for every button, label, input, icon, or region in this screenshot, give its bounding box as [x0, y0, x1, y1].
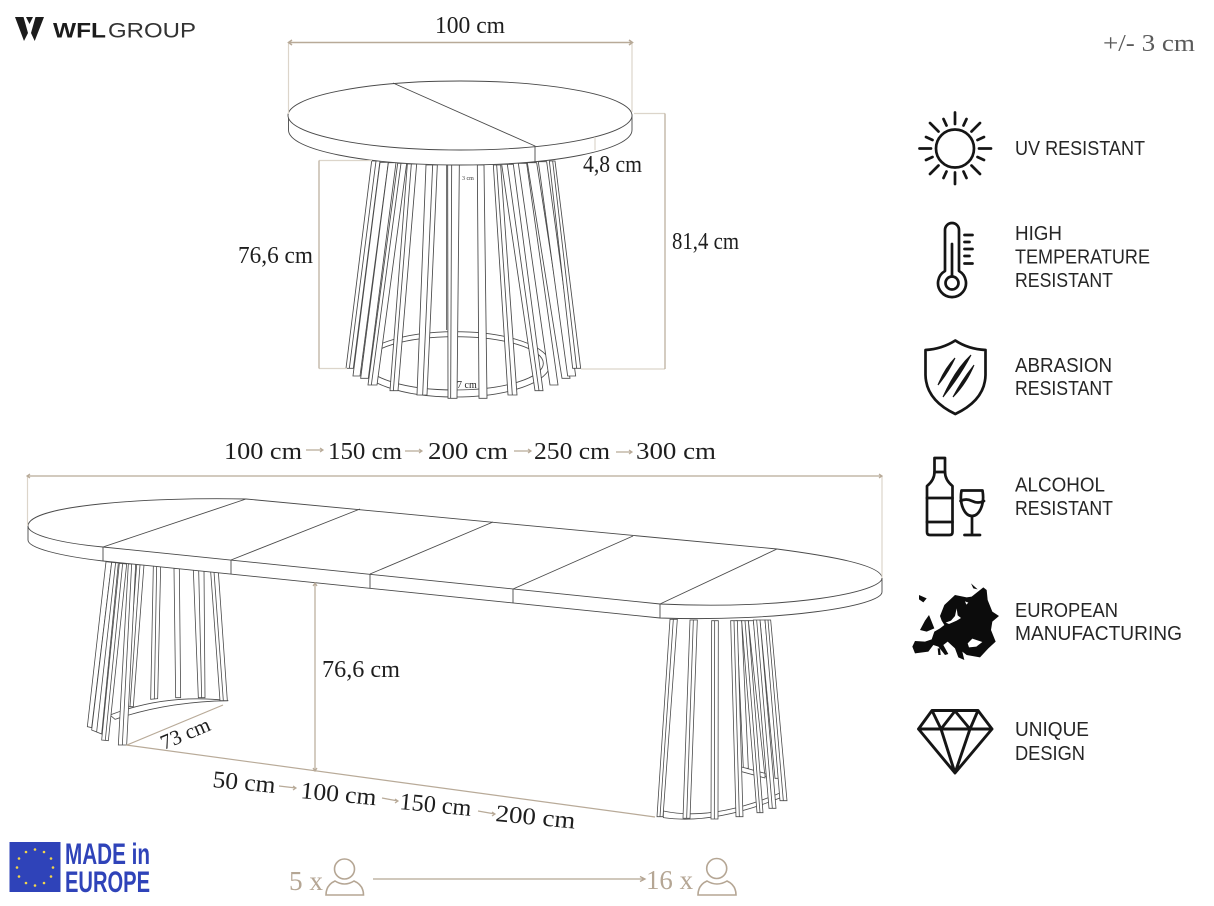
extension length labels: [224, 439, 716, 465]
icon: W mark: [15, 17, 44, 41]
extended leg height dimension: 76,6 cm: [322, 657, 400, 683]
leg spacing dimension: [126, 745, 655, 835]
logo wordmark: [53, 20, 196, 42]
label: TEMPERATURE: [1015, 246, 1150, 268]
icon: map of Europe: [912, 583, 999, 660]
logo wordmark: GROUP: [108, 20, 196, 42]
depth dimension: [127, 705, 223, 755]
label: [1015, 222, 1150, 292]
icon: scratched shield: [926, 340, 986, 414]
label: [1015, 474, 1113, 520]
extended leg height dimension: [313, 583, 400, 771]
feature: European manufacturing: [912, 583, 1182, 660]
label: MANUFACTURING: [1015, 622, 1182, 645]
label: HIGH: [1015, 222, 1062, 245]
leg spacing dimension: 100 cm: [299, 778, 378, 811]
left table base: [87, 562, 228, 745]
extended width dimension: [27, 474, 882, 578]
label: [1015, 718, 1089, 765]
feature: UV resistant: [920, 112, 1145, 184]
leg height dimension: [238, 160, 372, 368]
total height dimension: [581, 114, 739, 369]
top thickness dimension: [583, 137, 642, 178]
slat width labels: [457, 176, 477, 391]
width dimension: [288, 13, 632, 114]
label: UNIQUE: [1015, 718, 1089, 741]
leg spacing dimension: 200 cm: [494, 801, 577, 835]
badge text: [65, 838, 150, 899]
slat width labels: 3 cm: [462, 176, 474, 182]
logo wordmark: WFL: [53, 20, 106, 42]
label: ABRASION: [1015, 354, 1112, 377]
arrow: [373, 876, 645, 882]
leg spacing dimension: 50 cm: [211, 767, 277, 799]
tolerance note: +/- 3 cm: [1103, 31, 1195, 57]
label: [1015, 599, 1182, 645]
icon: person: [698, 858, 736, 895]
label: EUROPEAN: [1015, 599, 1118, 622]
label: RESISTANT: [1015, 497, 1113, 520]
extension length labels: 200 cm: [428, 439, 508, 465]
feature: unique design: [918, 710, 1089, 773]
label: RESISTANT: [1015, 269, 1113, 292]
extended table top: [28, 499, 882, 619]
extension length labels: 250 cm: [534, 439, 610, 465]
right table base: [657, 619, 787, 819]
table top: [288, 81, 632, 165]
extension length labels: 300 cm: [636, 439, 716, 465]
icon: diamond: [918, 710, 992, 773]
extended table drawing: [27, 474, 882, 835]
icon: EU flag: [10, 842, 60, 892]
feature: alcohol resistant: [927, 458, 1113, 535]
label: ALCOHOL: [1015, 474, 1105, 496]
label: [1015, 354, 1113, 400]
badge text: MADE in: [65, 838, 150, 871]
logo: WFL Group: [15, 17, 196, 42]
label: UV RESISTANT: [1015, 137, 1145, 160]
leg height dimension: 76,6 cm: [238, 243, 313, 269]
badge: made in Europe: [10, 838, 150, 899]
slat width labels: 7 cm: [457, 380, 477, 391]
label: 5 x: 5 x: [289, 866, 324, 896]
icon: sun: [920, 112, 991, 184]
top thickness dimension: 4,8 cm: [583, 152, 642, 178]
round table drawing: [238, 13, 739, 398]
leg spacing dimension: 150 cm: [398, 789, 473, 822]
badge text: EUROPE: [65, 866, 150, 899]
extension length labels: 150 cm: [328, 439, 402, 465]
table base slats: [346, 161, 581, 398]
icon: thermometer: [938, 223, 972, 297]
icon: bottle and glass: [927, 458, 984, 535]
total height dimension: 81,4 cm: [672, 229, 739, 255]
icon: person: [326, 859, 364, 895]
label: DESIGN: [1015, 742, 1085, 765]
label: RESISTANT: [1015, 377, 1113, 400]
width dimension: 100 cm: [435, 13, 505, 39]
feature: abrasion resistant: [926, 340, 1113, 414]
feature: high temperature resistant: [938, 222, 1150, 297]
extension length labels: 100 cm: [224, 439, 302, 465]
depth dimension: 73 cm: [157, 712, 214, 755]
seating capacity: 5 to 16 people: [289, 858, 736, 896]
label: 16 x: 16 x: [646, 865, 693, 895]
